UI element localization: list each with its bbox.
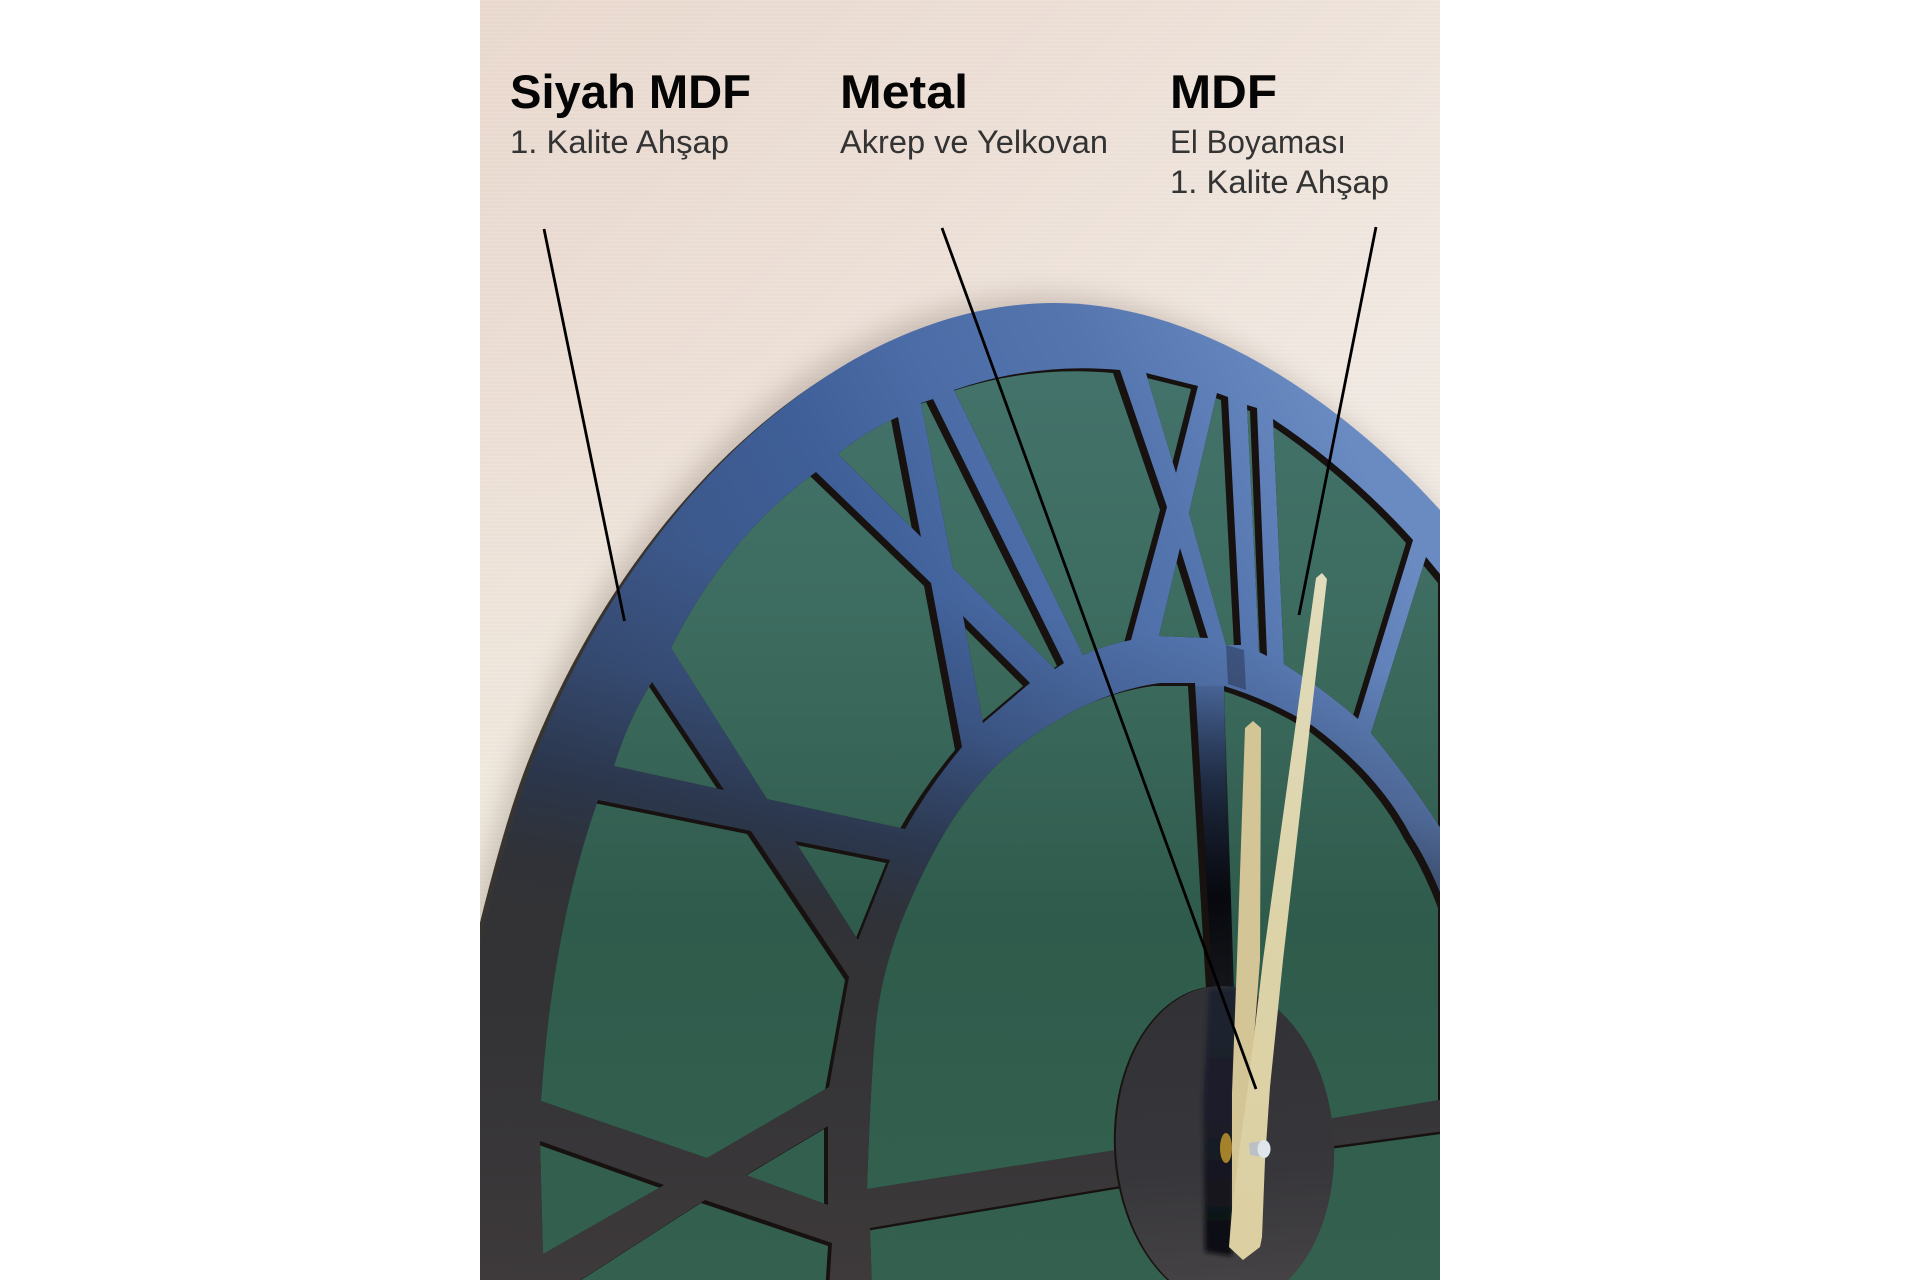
description: Akrep ve Yelkovan	[840, 124, 1108, 160]
clock face ring and numerals	[470, 303, 1470, 1280]
brass shaft	[1220, 1133, 1232, 1163]
description: 1. Kalite Ahşap	[510, 124, 729, 160]
hand shadow on hub	[1203, 988, 1238, 1256]
clock side edge	[480, 376, 827, 942]
clock shadow on wall	[480, 286, 1440, 922]
hub edge shadow	[1114, 987, 1206, 1280]
label: Siyah MDF	[510, 65, 751, 160]
minute hand	[1229, 573, 1327, 1260]
wall clock	[458, 296, 1470, 1280]
label: MDF	[1170, 65, 1389, 200]
description line 2: 1. Kalite Ahşap	[1170, 164, 1389, 200]
heading: Metal	[840, 65, 968, 118]
silver screw	[1249, 1140, 1270, 1158]
glossy 12 o'clock bar	[1195, 645, 1246, 992]
leader line: Metal	[942, 228, 1256, 1089]
description: El Boyaması	[1170, 124, 1346, 160]
green openings lower	[540, 682, 1440, 1280]
wall background	[480, 0, 1440, 922]
photo panel	[458, 0, 1470, 1280]
green openings upper	[671, 368, 1440, 1189]
heading: Siyah MDF	[510, 65, 751, 118]
heading: MDF	[1170, 65, 1277, 118]
centre hub	[1108, 981, 1342, 1280]
hour hand	[1232, 721, 1261, 1215]
leader line: Siyah MDF	[544, 229, 624, 621]
leader line: MDF	[1299, 227, 1376, 615]
label: Metal	[840, 65, 1108, 160]
